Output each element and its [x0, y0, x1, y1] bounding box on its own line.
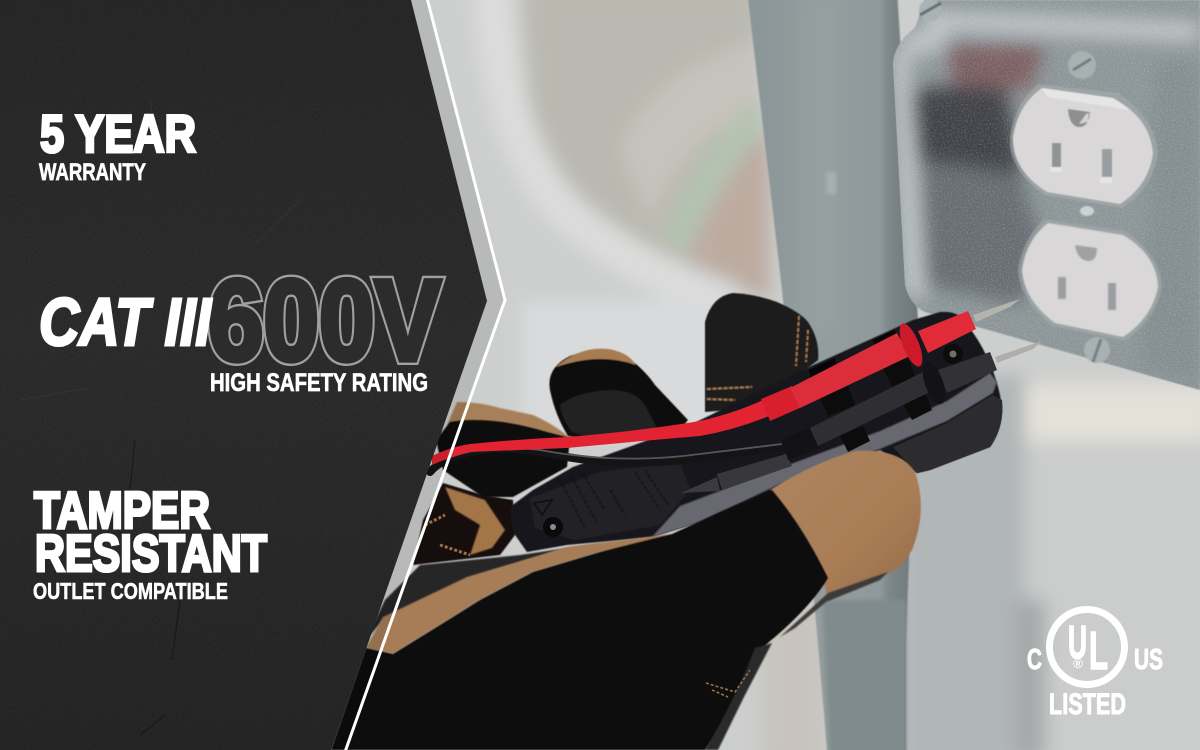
registered mark: ®: [1073, 656, 1083, 671]
tester grey grip: [652, 373, 997, 537]
cuff strip: [780, 572, 888, 637]
tester clips: [820, 358, 932, 452]
feature: CAT III 600V: [39, 257, 441, 397]
subheading: warranty: WARRANTY: [39, 159, 146, 186]
tester hex panel: [893, 395, 1002, 473]
icon: outlet upper: [1010, 84, 1158, 208]
red lead body: [790, 333, 910, 408]
white chevron line: [345, 0, 505, 750]
label: US: US: [1134, 644, 1163, 676]
tester body text area: [530, 462, 690, 540]
brown thumb tip: [770, 451, 921, 600]
subheading: outlet compatible: OUTLET COMPATIBLE: [33, 578, 228, 604]
feature: tamper resistant: [33, 482, 267, 604]
tester slots: [809, 330, 897, 378]
icon: cover screws: [1068, 51, 1110, 363]
heading: TAMPER: TAMPER: [34, 482, 210, 540]
duplex outlet: [1010, 51, 1162, 363]
red lead collar: [895, 321, 927, 369]
outlined heading: 600V: 600V: [208, 257, 441, 385]
label: C: C: [1027, 644, 1042, 676]
black lead body: [810, 372, 930, 446]
brown palm strip: [366, 534, 672, 654]
black lead needle: [995, 341, 1042, 363]
outlet box cover: [892, 0, 1200, 392]
black lead collar: [918, 359, 950, 407]
lower cuff: [705, 643, 772, 750]
stitching: [706, 670, 750, 697]
heading: CAT III: CAT III: [39, 285, 212, 360]
heading: RESISTANT: RESISTANT: [35, 525, 267, 583]
icon: outlet lower: [1018, 219, 1162, 341]
gloved hand, back fingers: [413, 293, 818, 565]
icon: tester screw: [543, 517, 563, 537]
black lead tip: [938, 352, 997, 393]
feature: 5 year warranty: [39, 105, 196, 186]
black palm: [331, 490, 828, 750]
black test lead: [430, 341, 1042, 493]
black probe stored tip: [681, 477, 720, 493]
red test lead: [432, 299, 1020, 465]
icon: upper screw: [943, 344, 963, 364]
subheading: high safety rating: HIGH SAFETY RATING: [210, 369, 428, 397]
heading: 5 YEAR: 5 YEAR: [40, 105, 196, 164]
icon: UL ring: [1050, 610, 1124, 684]
dark stitched band: [366, 537, 640, 640]
red lead needle: [973, 299, 1020, 322]
letter U: U: [1068, 616, 1087, 668]
non-contact tester body: [510, 312, 1002, 552]
index finger: [705, 293, 818, 412]
middle finger: [549, 349, 688, 440]
translucent band beside the panel: [325, 0, 506, 750]
black lead strain relief: [782, 427, 818, 460]
letter L: L: [1089, 621, 1108, 681]
icon: top screw: [919, 0, 941, 21]
dark text panel: [0, 0, 490, 750]
UL listed mark: [1027, 610, 1163, 721]
outlined heading: 600V: 600V: [208, 257, 441, 385]
thumb and palm: [331, 451, 921, 750]
icon: warning triangle: [534, 500, 552, 515]
red lead strain relief: [761, 386, 802, 421]
label: LISTED: LISTED: [1049, 688, 1126, 721]
red lead tip: [918, 311, 976, 353]
ring finger and lower glove: [413, 402, 570, 565]
metal stud: [747, 0, 918, 750]
